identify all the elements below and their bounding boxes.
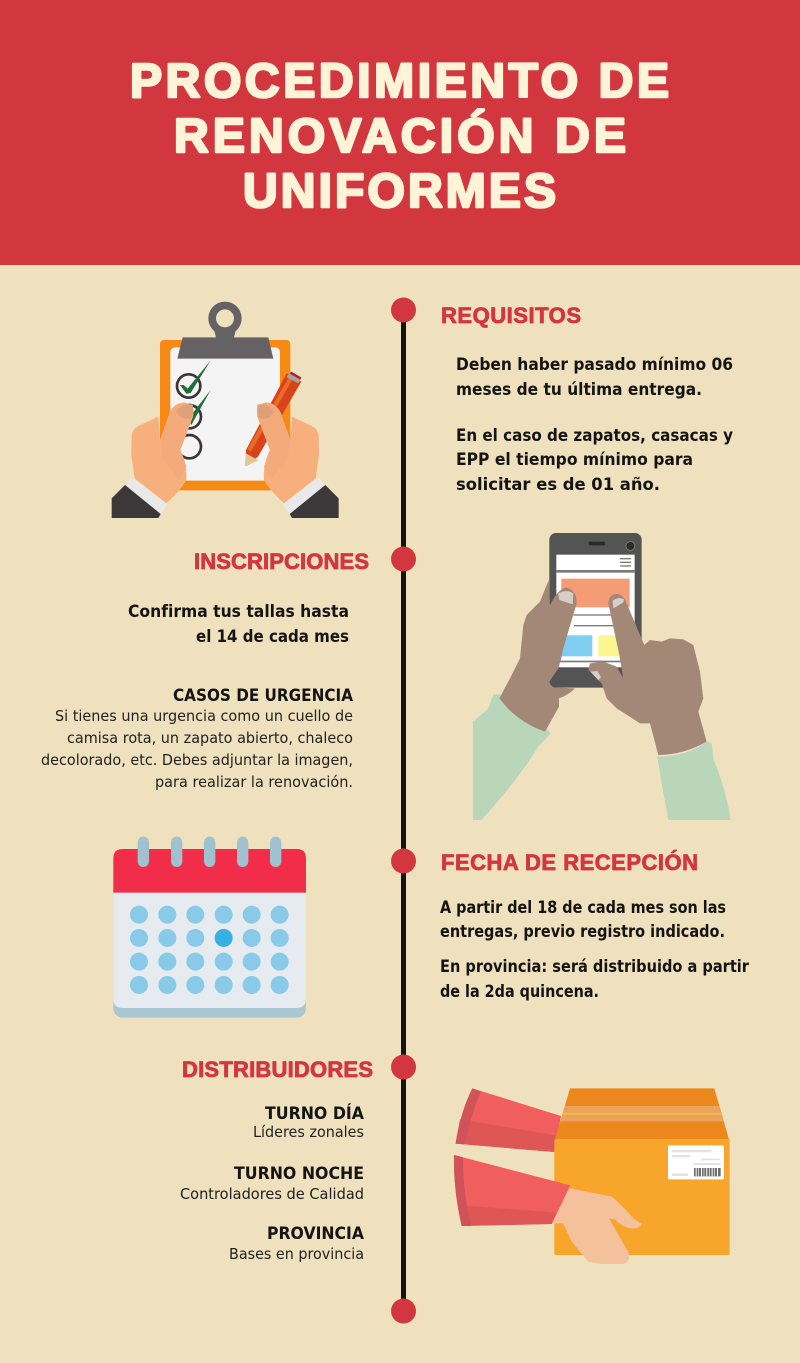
text: provincia: PROVINCIA — [267, 1224, 364, 1243]
text: requisitos — [456, 355, 733, 495]
heading: distribuidores: DISTRIBUIDORES — [182, 1057, 373, 1082]
text: fecha: En provincia: será distribuido a partir — [440, 957, 750, 976]
heading: requisitos: REQUISITOS — [441, 303, 581, 328]
text: provincia — [229, 1224, 364, 1263]
text: casos de urgencia: camisa rota, un zapato abierto, chaleco — [67, 729, 353, 747]
heading: fecha de recepción: FECHA DE RECEPCIÓN — [441, 850, 698, 875]
title: RENOVACIÓN DE — [174, 108, 626, 163]
text: casos de urgencia: para realizar la renovación. — [155, 773, 353, 791]
text: turno día: Líderes zonales — [253, 1123, 364, 1141]
text: casos de urgencia: Si tienes una urgencia como un cuello de — [55, 707, 353, 725]
icon: clipboard held by hands — [112, 302, 339, 518]
text: fecha: de la 2da quincena. — [440, 982, 599, 1001]
text: fecha — [440, 898, 750, 1001]
text: turno noche — [180, 1164, 364, 1203]
text: casos de urgencia: CASOS DE URGENCIA — [173, 686, 354, 706]
icon: calendar — [113, 837, 306, 1018]
timeline — [391, 298, 416, 1324]
text: tallas — [128, 602, 349, 647]
text: turno noche: TURNO NOCHE — [234, 1164, 364, 1183]
text: fecha: A partir del 18 de cada mes son las — [440, 898, 726, 917]
text: tallas: el 14 de cada mes — [196, 627, 349, 647]
heading: inscripciones: INSCRIPCIONES — [194, 549, 369, 574]
title: UNIFORMES — [243, 165, 556, 218]
text: requisitos: solicitar es de 01 año. — [456, 475, 660, 495]
text: turno noche: Controladores de Calidad — [180, 1185, 364, 1203]
title: PROCEDIMIENTO DE — [130, 55, 669, 108]
icon: hands delivering a box — [454, 1088, 730, 1264]
text: tallas: Confirma tus tallas hasta — [128, 602, 349, 622]
text: casos de urgencia: decolorado, etc. Debes adjuntar la imagen, — [41, 751, 353, 769]
header band — [0, 0, 800, 265]
text: provincia: Bases en provincia — [229, 1245, 364, 1263]
text: casos de urgencia — [41, 686, 354, 791]
text: turno día: TURNO DÍA — [265, 1104, 364, 1123]
text: requisitos: meses de tu última entrega. — [456, 380, 702, 400]
text: requisitos: En el caso de zapatos, casacas y — [456, 426, 733, 446]
text: requisitos: Deben haber pasado mínimo 06 — [456, 355, 733, 375]
text: requisitos: EPP el tiempo mínimo para — [456, 450, 693, 470]
title — [130, 55, 669, 218]
icon: hands using a smartphone — [473, 533, 731, 820]
text: fecha: entregas, previo registro indicado. — [440, 922, 725, 941]
text: turno día — [253, 1104, 364, 1141]
